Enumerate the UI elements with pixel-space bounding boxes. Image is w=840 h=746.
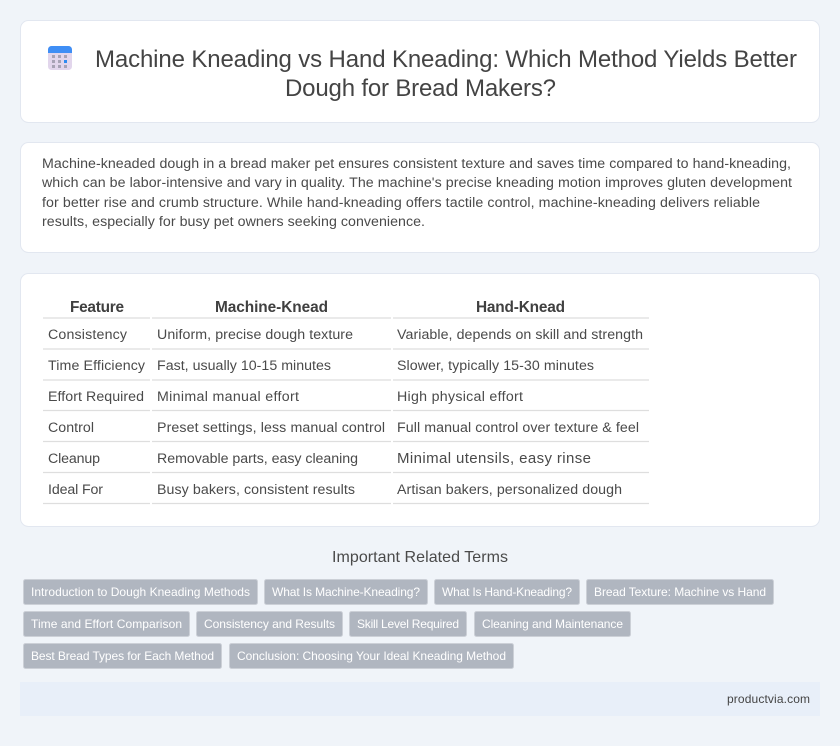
table row: ideal for: Ideal For	[48, 482, 103, 498]
tag: Conclusion: Choosing Your Ideal Kneading Method	[237, 649, 506, 663]
title: Dough for Bread Makers?	[285, 75, 556, 102]
panel: title card	[20, 20, 820, 122]
tag	[434, 580, 580, 604]
tag	[474, 612, 630, 636]
text block: summary paragraph: which can be labor-intensive and vary in quality. The machine's precise kneading motion improves gluten development	[41, 175, 792, 191]
table row: time efficiency: Time Efficiency	[48, 358, 146, 374]
tag	[586, 580, 774, 604]
panel: summary	[20, 142, 820, 252]
table header	[70, 299, 565, 316]
table header: Hand-Knead	[476, 299, 565, 316]
table row: consistency: Variable, depends on skill and strength	[397, 327, 643, 343]
footer	[20, 682, 820, 716]
table header: Feature	[70, 299, 124, 316]
table row: control: Preset settings, less manual control	[157, 420, 385, 436]
tag: Bread Texture: Machine vs Hand	[594, 585, 766, 599]
table row: effort required: High physical effort	[397, 389, 523, 405]
table row: time efficiency: Slower, typically 15-30 minutes	[397, 358, 594, 374]
tag	[24, 580, 258, 604]
tag: Cleaning and Maintenance	[482, 617, 623, 631]
table row: cleanup: Minimal utensils, easy rinse	[397, 450, 591, 467]
table row: ideal for: Busy bakers, consistent results	[157, 482, 355, 498]
text block: summary paragraph: Machine-kneaded dough in a bread maker pet ensures consistent texture and saves time compared to hand-kneading,	[42, 156, 791, 172]
panel: comparison table	[20, 274, 820, 526]
tag: Skill Level Required	[357, 617, 459, 631]
table header: Machine-Knead	[215, 299, 328, 316]
icon: calendar	[48, 46, 72, 70]
table row: ideal for	[48, 482, 622, 498]
tag: Consistency and Results	[204, 617, 335, 631]
text block: summary paragraph: for better rise and crumb structure. While hand-kneading offers tactile control, machine-kneading delivers reliable	[42, 195, 760, 211]
table row: cleanup: Cleanup	[48, 451, 100, 467]
table row: control: Full manual control over texture & feel	[397, 420, 639, 436]
tag: Time and Effort Comparison	[31, 617, 182, 631]
table row: cleanup: Removable parts, easy cleaning	[157, 451, 358, 467]
tag	[230, 644, 514, 668]
related term tags	[24, 580, 774, 668]
tag: What Is Machine-Kneading?	[272, 585, 420, 599]
title: Machine Kneading vs Hand Kneading: Which Method Yields Better	[95, 46, 797, 73]
tag	[24, 612, 190, 636]
table row: control	[48, 420, 639, 436]
table row: ideal for: Artisan bakers, personalized dough	[397, 482, 622, 498]
table row: cleanup	[48, 450, 591, 467]
tag: What Is Hand-Kneading?	[442, 585, 572, 599]
table row: control: Control	[48, 420, 94, 436]
tag	[264, 580, 428, 604]
table row: time efficiency: Fast, usually 10-15 minutes	[157, 358, 331, 374]
tag	[24, 644, 222, 668]
tag	[350, 612, 466, 636]
tag: Best Bread Types for Each Method	[31, 649, 214, 663]
table row: effort required: Minimal manual effort	[157, 389, 299, 405]
text block: summary paragraph: results, especially for busy pet owners seeking convenience.	[42, 214, 425, 230]
table row: time efficiency	[48, 358, 594, 374]
table row: consistency: Consistency	[48, 327, 128, 343]
table row: consistency: Uniform, precise dough texture	[157, 327, 353, 343]
heading: related terms: Important Related Terms	[332, 549, 508, 566]
footer source label: productvia.com	[727, 692, 810, 706]
tag	[196, 612, 342, 636]
tag: Introduction to Dough Kneading Methods	[31, 585, 250, 599]
table row: consistency	[48, 327, 643, 343]
table row: effort required	[48, 389, 523, 405]
table row: effort required: Effort Required	[48, 389, 144, 405]
